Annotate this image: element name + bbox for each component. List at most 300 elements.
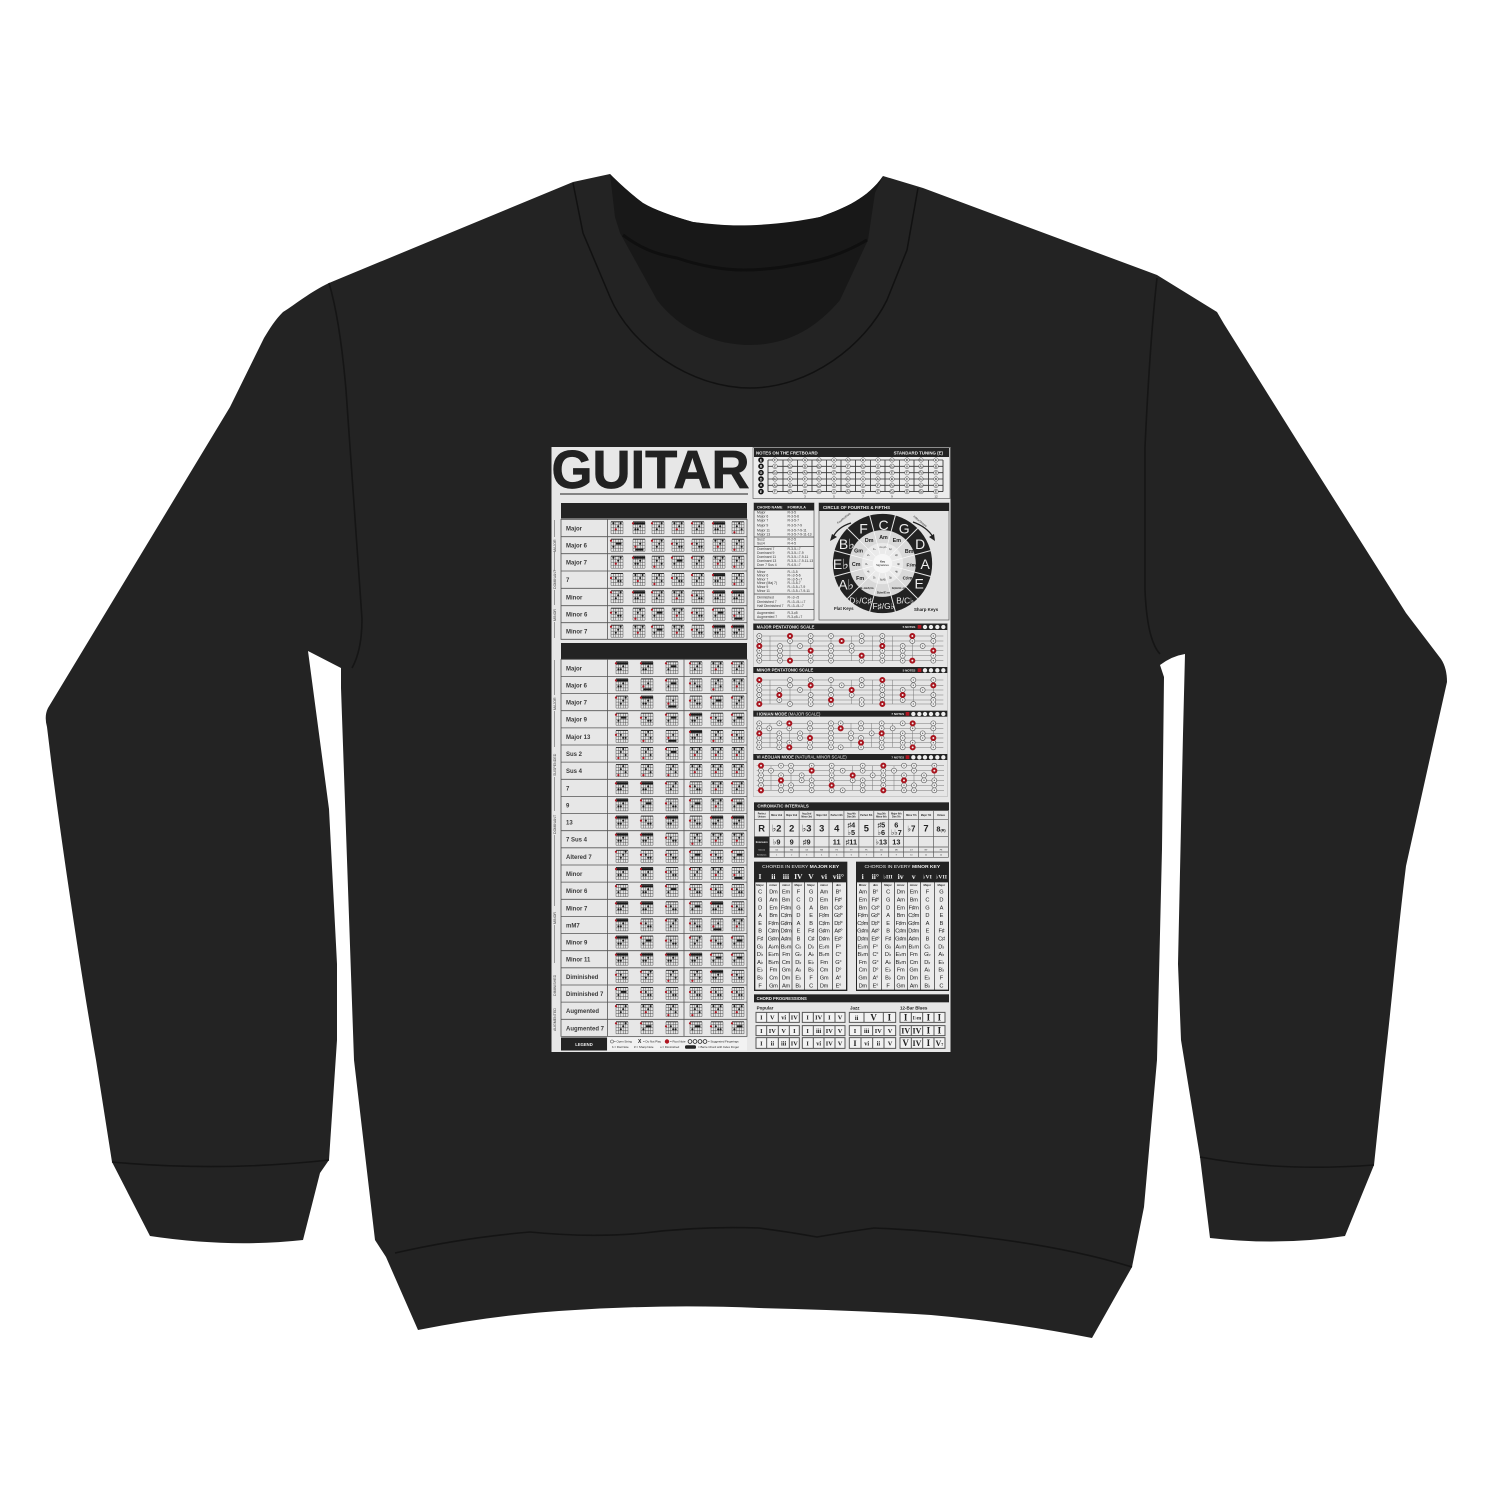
chord qualities: minor <box>782 883 791 887</box>
chord names: Am <box>782 983 791 989</box>
roman numerals: IV <box>913 1039 922 1048</box>
note names: B <box>862 490 864 494</box>
column backgrounds <box>857 882 948 990</box>
chord names: F♯ <box>808 929 814 935</box>
chord names: Bm <box>769 913 778 919</box>
roman numerals: iv <box>898 872 904 881</box>
extension numerals: ♭9 <box>773 837 780 846</box>
formula list: R-3-5-♭7 <box>788 547 801 551</box>
formula rows: 7 <box>866 855 867 857</box>
chord names: F♯m <box>781 905 792 911</box>
chord row: 7: 7 <box>566 578 570 584</box>
chord row: 7 Sus 4 <box>566 833 744 845</box>
note names: G♯ <box>919 483 923 487</box>
chord names: Bm <box>820 905 829 911</box>
chord row: 7 <box>566 574 744 586</box>
formula list: Minor <box>757 570 766 574</box>
interval names: Dim 5th <box>847 815 856 818</box>
formula list: Sus2 <box>757 538 765 542</box>
roman numerals: I <box>904 1013 908 1023</box>
roman numerals: vi <box>816 1040 821 1047</box>
panel: aeolian mode: VI AEOLIAN MODE (NATURAL MINOR SCALE) <box>757 755 847 760</box>
chord names: Fm <box>770 968 778 974</box>
formula list: Half Diminished 7 <box>757 604 784 608</box>
chord names: G° <box>872 960 878 966</box>
note names: B <box>935 464 937 468</box>
circle chart <box>833 514 932 613</box>
chord names: E♭ <box>924 974 931 981</box>
chord names: F♯m <box>909 905 919 911</box>
panel: major pentatonic scale <box>753 624 947 661</box>
formula list: Dominant 11 <box>757 555 776 559</box>
interval names: Dim 7th <box>892 815 901 818</box>
chord names: Dm <box>897 890 905 896</box>
section labels: Popular <box>757 1005 774 1010</box>
chord names: C♭ <box>795 943 802 950</box>
chord names: G <box>886 897 890 903</box>
extension numerals: 13 <box>892 837 900 846</box>
interval numerals: 8(R) <box>936 825 946 834</box>
panel: circle of fourths and fifths <box>819 503 949 620</box>
formula list: R-3-5-7 <box>788 518 799 522</box>
note names: C♯ <box>890 458 894 462</box>
panel: chromatic intervals <box>754 802 949 857</box>
extension numerals: ♯9 <box>803 837 811 846</box>
side labels: MINOR <box>553 912 557 924</box>
note fill <box>775 460 936 492</box>
chord row: Augmented <box>566 1005 744 1017</box>
formula list: R-3-5-7-9-11 <box>788 528 807 532</box>
chord row: Major 13 <box>566 730 744 742</box>
chord names: G♯° <box>834 913 843 919</box>
roman numerals: I <box>938 1013 942 1023</box>
key signature labels: 4♯ <box>895 569 899 573</box>
chord names: B♭ <box>808 967 815 974</box>
chord names: A <box>758 913 762 919</box>
formula rows: 6 <box>851 855 853 857</box>
chord names: Fm <box>782 952 790 958</box>
chord names: F♯m <box>768 921 779 927</box>
chord row: Minor 7 <box>566 625 744 637</box>
chord names: Am <box>910 983 918 989</box>
chord names: E♭m <box>768 951 779 958</box>
formula list: Major <box>757 510 766 514</box>
panel: notes on the fretboard: STANDARD TUNING (E) <box>894 451 944 456</box>
grid frame <box>561 519 747 639</box>
interval names: Aug 5th <box>877 812 886 815</box>
chord names: E♭m <box>858 943 868 950</box>
chord row: Major 7 <box>566 556 744 568</box>
interval names: Aug 4th <box>847 812 856 815</box>
interval names: Aug 2nd <box>802 812 812 815</box>
formula list: R-♭3-♭5 <box>788 596 799 600</box>
formula list: Minor 7 <box>757 577 768 581</box>
note names: D♯ <box>846 483 850 487</box>
note names: G <box>935 471 937 475</box>
formula rows: 4 <box>821 855 823 857</box>
chord names: D <box>939 897 943 903</box>
hub label <box>876 560 890 567</box>
roman numerals: I <box>853 1039 857 1048</box>
chord names: G♯m <box>768 936 779 942</box>
formula list: R-4-5-♭7 <box>788 563 801 567</box>
chord names: B♭m <box>768 959 779 966</box>
chord names: C <box>796 897 800 903</box>
roman numerals: iii <box>864 1028 870 1035</box>
chord row: Major 7: Major 7 <box>566 701 588 707</box>
chord row: Altered 7 <box>566 850 744 862</box>
chord names: E♭ <box>938 959 945 966</box>
note names: E <box>789 477 791 481</box>
roman numerals: I <box>938 1026 942 1036</box>
chord names: Bm <box>897 913 905 919</box>
note names: D <box>906 458 908 462</box>
note names: B <box>818 471 820 475</box>
note names: A♯ <box>803 471 807 475</box>
chord names: C° <box>835 952 841 958</box>
chord names: Dm <box>910 975 918 981</box>
chord names: B♭m <box>909 943 919 950</box>
armhole seams <box>329 278 1160 668</box>
minor key labels: Em <box>893 538 901 544</box>
minor key labels: Bm <box>905 549 914 555</box>
note names: A <box>862 477 864 481</box>
chord names: B <box>926 936 930 942</box>
collar interior <box>610 174 883 345</box>
note dots <box>759 680 933 704</box>
key signature labels: 3♭ <box>865 562 869 566</box>
roman numerals: I <box>759 872 762 881</box>
chord names: F <box>758 983 762 989</box>
note names: D♯ <box>876 471 880 475</box>
formula list: Major 7 <box>757 518 768 522</box>
chord names: C♯° <box>871 905 880 911</box>
interval numerals: 4 <box>834 824 840 834</box>
roman numerals: i <box>862 872 865 881</box>
note markers <box>775 460 936 492</box>
formula list: Sus4 <box>757 542 765 546</box>
interval names: Octave <box>937 814 946 817</box>
chord row: Diminished 7: Diminished 7 <box>566 992 604 998</box>
chord names: B♭m <box>858 951 868 958</box>
chord names: E♭m <box>819 943 830 950</box>
roman numerals: vi <box>864 1040 869 1047</box>
chord names: G <box>925 905 929 911</box>
chord names: E♯° <box>871 936 879 942</box>
panel frame <box>754 503 814 620</box>
chord row: 7 <box>566 782 744 794</box>
collar stitching <box>623 235 867 270</box>
formula rows: TT <box>850 850 853 852</box>
note names: B <box>789 483 791 487</box>
chord names: C <box>925 897 929 903</box>
side labels: SUSPENDED <box>553 753 557 776</box>
note names: A <box>833 490 835 494</box>
roman numerals: I <box>806 1028 809 1035</box>
chord names: A♯° <box>871 929 879 935</box>
interval names: Major 6th <box>891 812 902 815</box>
formula rows: M7 <box>925 850 927 852</box>
relative minor ring <box>849 530 916 597</box>
minor key labels: Cm <box>852 562 861 568</box>
formula rows: M3 <box>820 850 824 852</box>
minor key labels: Fm <box>856 576 864 582</box>
minor key labels: C♯m <box>903 575 912 580</box>
chord names: G♭ <box>924 951 931 958</box>
side labels: AUGMENTED <box>553 1008 557 1031</box>
formula list: R-3-5 <box>788 510 796 514</box>
roman numerals: I <box>927 1038 931 1048</box>
interval numerals: ♭3 <box>802 824 811 834</box>
chord names: Dm <box>859 983 867 989</box>
chord names: Bm <box>859 905 867 911</box>
chord row: Minor 6 <box>566 885 744 897</box>
chord names: G♯m <box>908 921 920 927</box>
chord names: D <box>925 913 929 919</box>
chord names: Gm <box>858 975 868 981</box>
chord row: Major 7 <box>566 696 744 708</box>
chord qualities: dim <box>873 883 878 887</box>
formula list: Dominant 9 <box>757 551 774 555</box>
note names: D <box>862 471 864 475</box>
chord names: C♯m <box>781 913 792 919</box>
chord names: Em <box>769 905 778 911</box>
roman numerals: I <box>927 1013 931 1023</box>
chord names: C♯° <box>834 905 843 911</box>
major key labels: G <box>899 521 910 537</box>
formula list: R-♭3-5-♭7-9-11 <box>788 589 810 593</box>
formula list: R-♭3-♭5-♭7 <box>788 604 804 608</box>
major key labels: D♭/C♯ <box>849 595 872 605</box>
section labels <box>757 1005 928 1011</box>
note names: F <box>847 464 849 468</box>
panel: ionian mode: 7 NOTES <box>891 712 904 716</box>
chord names: D♭ <box>885 951 892 958</box>
garment body <box>46 174 1447 1338</box>
formula rows: 10 <box>910 855 913 857</box>
chord names: Cm <box>859 968 867 974</box>
chord names: G° <box>835 960 841 966</box>
major key labels: E♭ <box>833 556 849 572</box>
chord names: Gm <box>909 968 919 974</box>
formula list: R-3-5-6 <box>788 514 799 518</box>
roman numerals: I <box>806 1015 809 1022</box>
note names: C♯ <box>846 471 850 475</box>
panel group: intervals and key tables <box>754 802 949 991</box>
chord names: F♯ <box>938 929 945 935</box>
note names: C <box>833 471 835 475</box>
side labels <box>553 520 557 638</box>
roman numerals: I <box>828 1015 831 1022</box>
note names: C <box>877 458 879 462</box>
chord names: F♯° <box>872 897 879 903</box>
chord names: G <box>809 890 813 896</box>
fret numbers: 5 <box>833 494 835 498</box>
formula list: R-3-5-♭7-9-11 <box>788 555 808 559</box>
note names: G <box>804 490 806 494</box>
chord row: Minor 11 <box>566 953 744 965</box>
chord row: mM7: mM7 <box>566 923 580 929</box>
formula rows: 11 <box>925 855 927 857</box>
hem and cuff seams <box>112 1157 1374 1267</box>
roman numerals: iii <box>781 1040 787 1047</box>
progression boxes <box>756 1012 945 1048</box>
roman numerals: I <box>760 1040 763 1047</box>
chord names: B <box>758 929 762 935</box>
roman numerals: V <box>838 1040 843 1047</box>
major key labels: C <box>878 517 889 533</box>
formula list: R-♭3-5-7 <box>788 581 801 585</box>
chord row: Sus 4 <box>566 765 744 777</box>
chord qualities: minor <box>897 883 905 887</box>
interval numerals: ♭2 <box>772 824 781 834</box>
major key labels: D <box>915 536 925 552</box>
open string markers: D <box>760 477 763 481</box>
chord names: A♭m <box>896 943 906 950</box>
chord row: Minor 9 <box>566 936 744 948</box>
scale frames <box>753 623 947 797</box>
note names: A♯ <box>846 458 850 462</box>
minor key labels: F♯m <box>907 562 916 567</box>
chord qualities: Major <box>807 883 816 887</box>
chord row: Minor 6: Minor 6 <box>566 889 588 895</box>
chord names: C <box>758 890 762 896</box>
chord names: C♯m <box>819 921 830 927</box>
chord row: 9 <box>566 799 744 811</box>
roman numerals: I <box>854 1028 857 1035</box>
roman numerals <box>760 1013 943 1048</box>
chord names: G♭ <box>885 943 892 950</box>
chord names: A♭ <box>885 959 892 966</box>
chord row: Augmented 7: Augmented 7 <box>566 1026 605 1032</box>
interval names <box>758 812 946 818</box>
key signature labels: 5♯ <box>889 575 893 579</box>
formula list: Augmented <box>757 611 774 615</box>
chord names: D♯° <box>834 921 843 927</box>
chord names: C° <box>872 952 878 958</box>
chord names: C♯ <box>808 936 815 942</box>
formula list: R-3-♯5 <box>788 611 798 615</box>
roman numerals <box>862 872 948 881</box>
extension row labels <box>754 837 769 857</box>
chord names: E <box>758 921 762 927</box>
chord names: Fm <box>897 968 905 974</box>
roman numerals: V <box>808 872 814 881</box>
note names: G♯ <box>773 471 777 475</box>
panel frame <box>819 503 949 620</box>
note names: D <box>833 483 835 487</box>
sweatshirt <box>46 174 1447 1338</box>
panel: ionian mode <box>753 711 947 747</box>
formula list: Diminished 7 <box>757 600 777 604</box>
open string markers: B <box>760 465 763 469</box>
chord names: D♭ <box>808 943 815 950</box>
chord names: D° <box>872 968 878 974</box>
formula list: R-2-5 <box>788 538 796 542</box>
legend label <box>561 1038 607 1050</box>
chord qualities: dim <box>836 883 841 887</box>
key signature labels: no ♯/♭ <box>880 545 887 549</box>
chord row: Major 7: Major 7 <box>566 561 588 567</box>
chord names: C♯m <box>895 929 907 935</box>
chord qualities: Major <box>924 883 932 887</box>
roman numerals: I♭m <box>913 1016 922 1022</box>
chord names: D♯m <box>781 929 792 935</box>
note names: F <box>774 490 776 494</box>
chord names: F♯m <box>858 913 868 919</box>
chord names: Dm <box>782 975 791 981</box>
header <box>754 802 949 810</box>
chord row: Minor: Minor <box>566 872 583 878</box>
hub label: Signatures <box>876 563 890 567</box>
major key labels: A♭ <box>838 576 854 592</box>
chord names: Fm <box>910 952 918 958</box>
roman numerals: IV <box>815 1015 823 1022</box>
formula rows: M6 <box>895 850 899 852</box>
panel: aeolian mode <box>753 754 947 790</box>
chord names: F <box>940 975 944 981</box>
formula list: Minor 11 <box>757 589 770 593</box>
chord names: G♯° <box>871 913 880 919</box>
fret numbers <box>804 494 938 498</box>
chord row: Augmented 7 <box>566 1022 744 1034</box>
header <box>753 624 947 630</box>
chord qualities <box>859 883 946 887</box>
header <box>753 754 947 760</box>
roman numerals: IV <box>794 872 803 881</box>
major key labels <box>833 517 930 611</box>
major key labels: A <box>920 556 930 572</box>
major key labels: F♯/G♭ <box>873 601 895 611</box>
chord names: D♯m <box>819 936 830 942</box>
table grid <box>754 811 948 857</box>
panel: chord progressions: CHORD PROGRESSIONS <box>757 996 807 1001</box>
legend: = Open String <box>614 1040 632 1044</box>
formula rows: 5 <box>836 855 838 857</box>
chord row: 13 <box>566 816 744 828</box>
interval names: Perfect 4th <box>831 814 843 817</box>
chord names: A <box>886 913 890 919</box>
chord names: G♯m <box>857 929 869 935</box>
formula list: Augmented 7 <box>757 615 777 619</box>
note names: A♯ <box>773 483 777 487</box>
note names: A <box>935 483 937 487</box>
panel group: scales <box>753 623 947 797</box>
interval names: Major 7th <box>921 814 932 817</box>
chord names: A♭ <box>757 959 764 966</box>
chord names: E♭ <box>795 974 802 981</box>
panel: circle of fourths and fifths: CIRCLE OF FOURTHS & FIFTHS <box>823 505 890 510</box>
note names: C <box>774 464 776 468</box>
major key labels: B/C♭ <box>896 595 914 605</box>
panel frame <box>753 448 950 498</box>
chord names: G <box>939 890 943 896</box>
chord names: E° <box>836 983 841 989</box>
panel: chords in every minor key: CHORDS IN EVERY MINOR KEY <box>864 864 941 870</box>
formula rows: Semitones <box>757 854 766 857</box>
note names: G <box>833 477 835 481</box>
legend: X <box>638 1039 642 1045</box>
chord row: Major 9: Major 9 <box>566 718 588 724</box>
note names: A <box>789 471 791 475</box>
legend: # = Sharp Note <box>634 1045 654 1049</box>
formula rows: m3 <box>805 850 809 852</box>
open string markers: A <box>760 484 763 488</box>
note names: F♯ <box>920 471 923 475</box>
note names: F♯ <box>818 477 821 481</box>
roman numerals: vi <box>781 1015 786 1022</box>
roman numerals: IV <box>769 1028 776 1035</box>
